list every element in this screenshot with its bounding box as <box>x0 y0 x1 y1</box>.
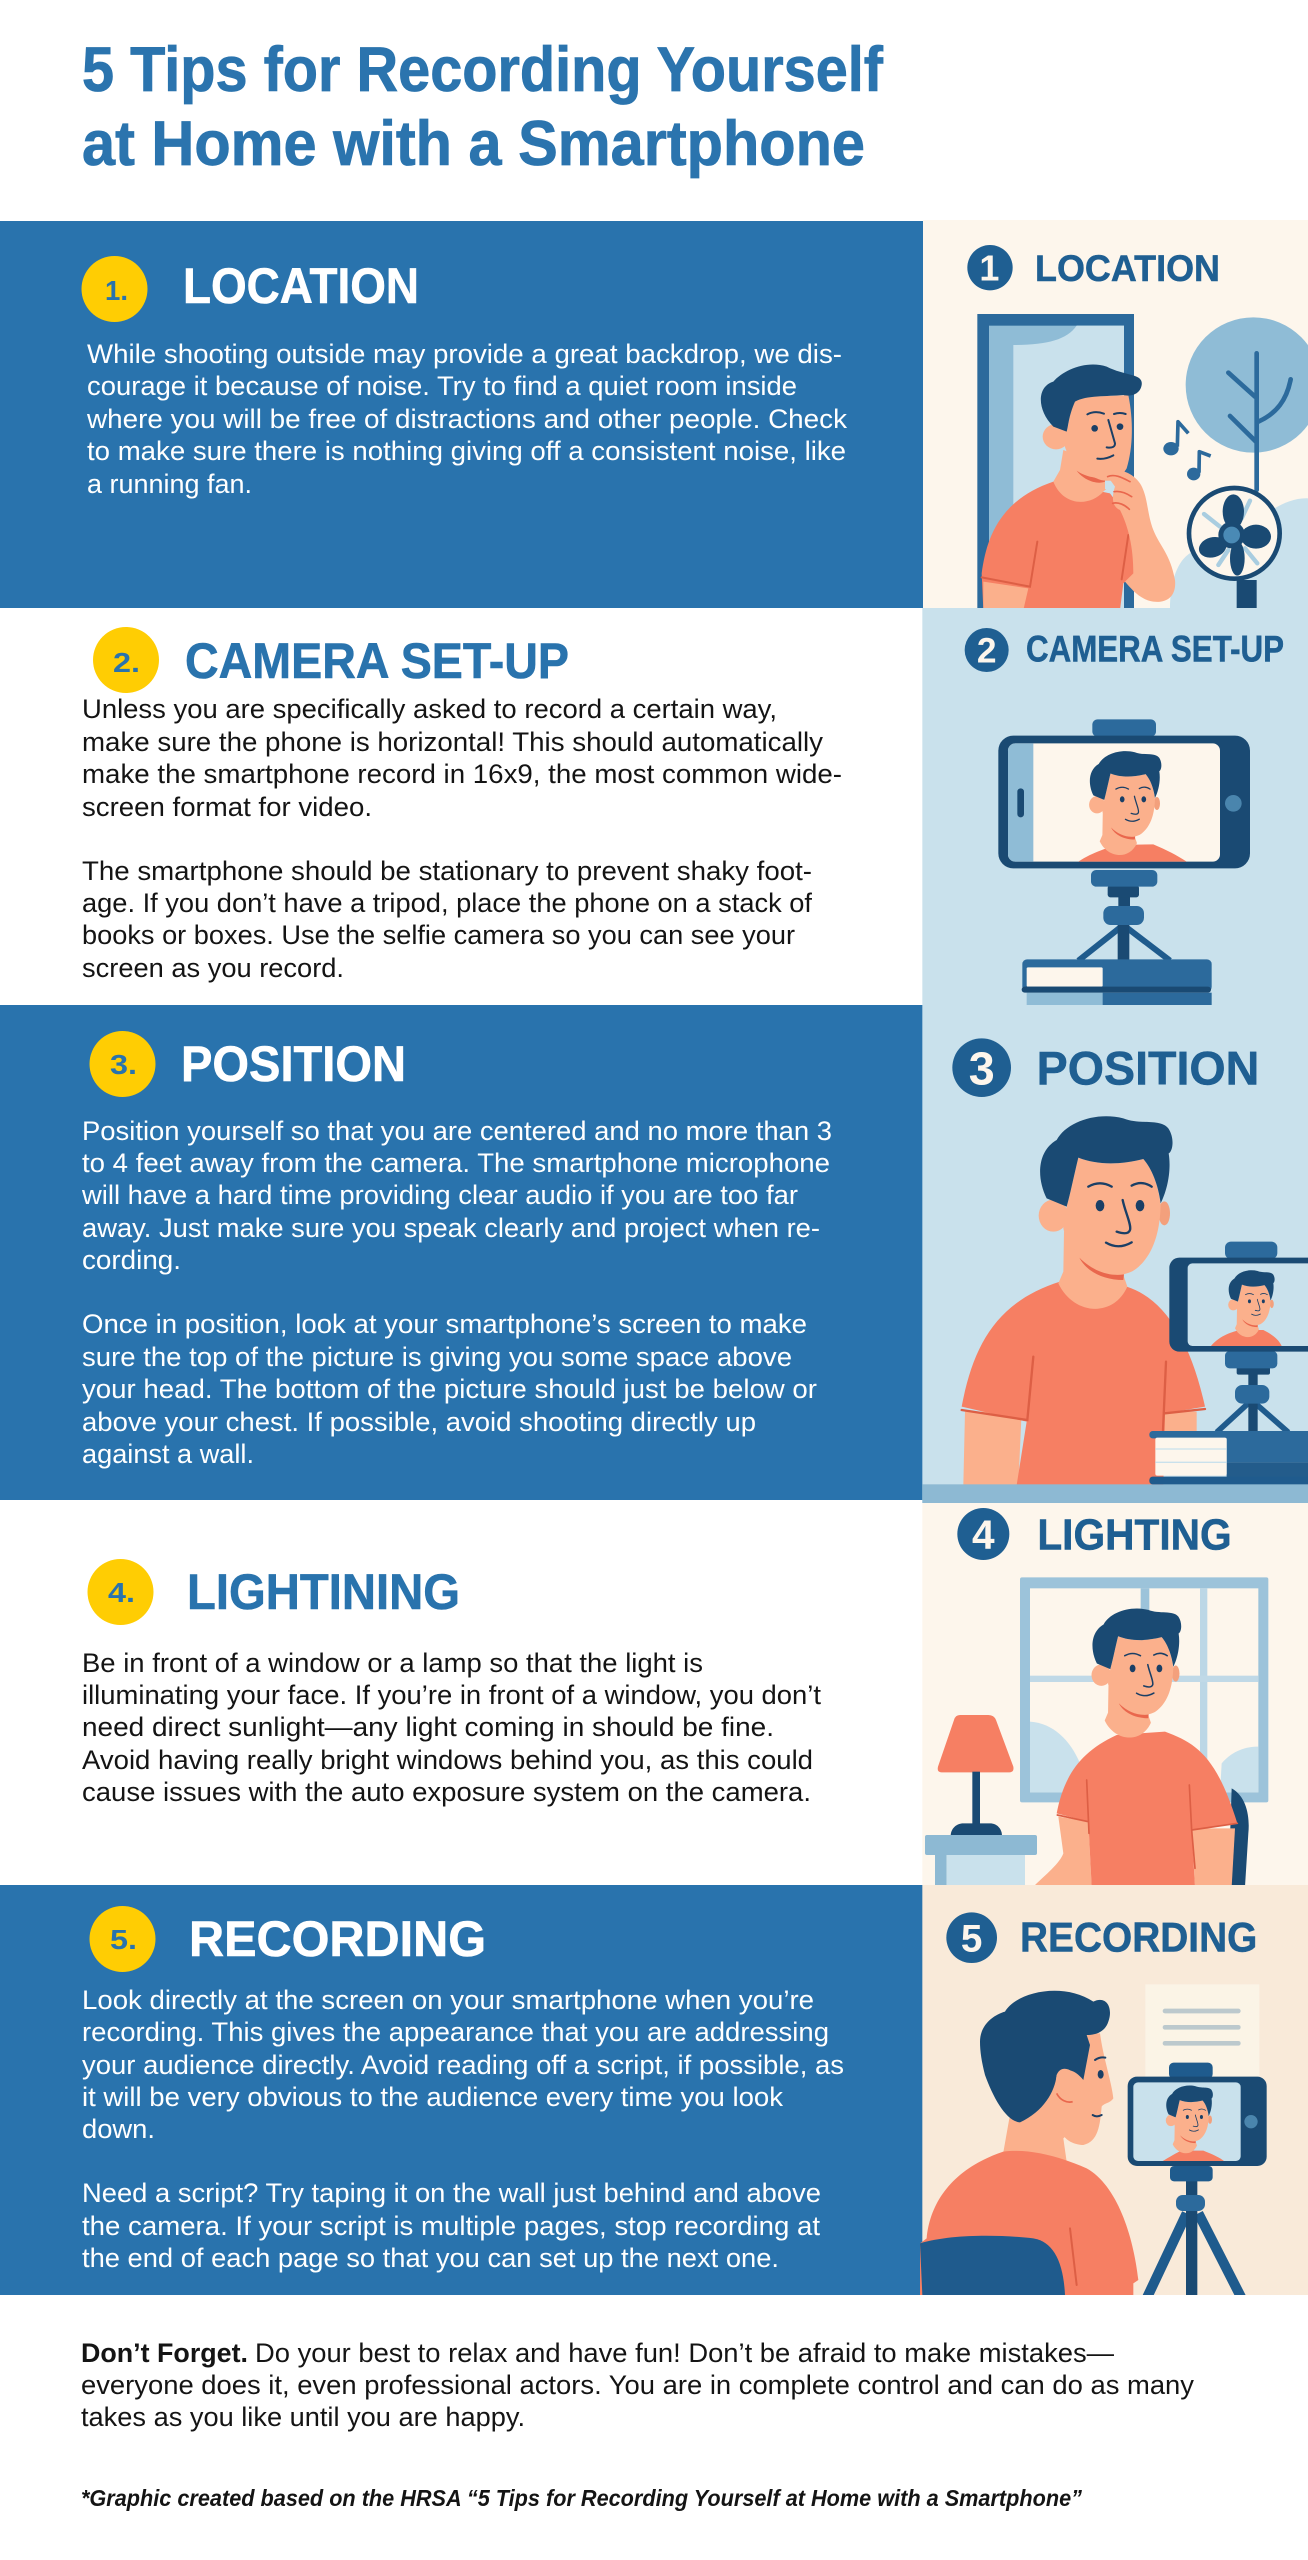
person from behind <box>920 1991 1138 2295</box>
step label 4: 4 <box>972 1512 995 1558</box>
step label 1: 1 <box>979 248 999 289</box>
script page <box>1145 1984 1259 2084</box>
title: at Home with a Smartphone <box>82 109 865 179</box>
body: recording: your audience directly. Avoid reading off a script, if possible, as <box>82 2050 844 2080</box>
body: recording: the end of each page so that you can set up the next one. <box>82 2243 779 2273</box>
tripod <box>1078 870 1170 961</box>
closing note: don't forget: takes as you like until you are happy. <box>81 2402 525 2432</box>
closing note: don't forget: Don’t Forget. <box>81 2338 248 2368</box>
body: lighting: Avoid having really bright windows behind you, as this could <box>82 1745 813 1775</box>
heading: lightining: LIGHTINING <box>187 1564 460 1620</box>
panel: camera set-up text <box>82 627 842 983</box>
body: position: to 4 feet away from the camera. The smartphone microphone <box>82 1148 830 1178</box>
tripod <box>1147 2166 1242 2298</box>
badge 1: 1. <box>105 275 128 306</box>
body: recording <box>82 1985 844 2273</box>
body: position: sure the top of the picture is giving you some space above <box>82 1342 792 1372</box>
window frame <box>977 314 1134 612</box>
badge 5: 5. <box>110 1924 137 1955</box>
body: camera set-up: Unless you are specifically asked to record a certain way, <box>82 694 777 724</box>
illustration: camera set-up <box>922 608 1308 1005</box>
body: camera set-up: age. If you don’t have a tripod, place the phone on a stack of <box>82 888 813 918</box>
body: lighting <box>82 1648 822 1807</box>
person facing camera <box>962 1116 1205 1485</box>
body: location <box>86 339 848 499</box>
body: location: courage it because of noise. Try to find a quiet room inside <box>87 371 797 401</box>
body: position <box>81 1116 832 1469</box>
body: location: to make sure there is nothing giving off a consistent noise, like <box>87 436 846 466</box>
phone on mount <box>998 719 1250 868</box>
panel: location text <box>0 221 923 608</box>
illustration: location <box>923 220 1308 608</box>
step label 3 <box>952 1038 1259 1097</box>
badge 2: 2. <box>113 647 140 678</box>
badge 3: 3. <box>110 1049 137 1080</box>
step label 5: 5 <box>961 1918 982 1961</box>
illustration: recording <box>920 1885 1308 2295</box>
badge 2 <box>93 627 159 693</box>
body: camera set-up: make the smartphone record in 16x9, the most common wide- <box>82 759 842 789</box>
body: position: above your chest. If possible, avoid shooting directly up <box>82 1407 756 1437</box>
badge 5 <box>90 1906 156 1972</box>
body: recording: recording. This gives the appearance that you are addressing <box>82 2017 829 2047</box>
tree <box>1170 317 1308 610</box>
body: camera set-up: The smartphone should be stationary to prevent shaky foot- <box>82 856 812 886</box>
body: position: Once in position, look at your smartphone’s screen to make <box>82 1309 807 1339</box>
title: 5 Tips for Recording Yourself <box>82 35 884 105</box>
badge 3 <box>90 1031 156 1097</box>
panel: lighting text <box>82 1559 822 1807</box>
badge 1 <box>82 256 148 322</box>
step label 3: 3 <box>969 1042 995 1094</box>
floor band <box>922 1484 1308 1503</box>
step label 4 <box>957 1508 1232 1560</box>
heading: location: LOCATION <box>183 258 419 314</box>
body: position: cording. <box>82 1245 181 1275</box>
window <box>1020 1577 1268 1802</box>
chair back <box>920 2236 1065 2295</box>
body: position: against a wall. <box>82 1439 254 1469</box>
panel: recording text <box>0 1885 923 2295</box>
icon: fan <box>1189 488 1280 610</box>
person in front of window <box>1033 1609 1237 1887</box>
body: lighting: illuminating your face. If you’re in front of a window, you don’t <box>82 1680 822 1710</box>
step label 3: POSITION <box>1037 1042 1259 1095</box>
body: position: away. Just make sure you speak clearly and project when re- <box>82 1213 820 1243</box>
closing note: don't forget <box>81 2338 1195 2432</box>
body: camera set-up: books or boxes. Use the selfie camera so you can see your <box>82 920 795 950</box>
step label 4: LIGHTING <box>1037 1511 1232 1559</box>
body: camera set-up: make sure the phone is horizontal! This should automatically <box>82 727 824 757</box>
step label 1 <box>967 245 1220 290</box>
chair <box>1228 1788 1249 1887</box>
lamp on table <box>925 1715 1037 1887</box>
body: recording: down. <box>82 2114 155 2144</box>
phone on tripod with small person <box>1169 1242 1308 1432</box>
body: position: will have a hard time providing clear audio if you are too far <box>81 1180 798 1210</box>
heading: recording: RECORDING <box>189 1911 486 1967</box>
step label 1: LOCATION <box>1035 247 1220 289</box>
closing note: don't forget: Do your best to relax and have fun! Don’t be afraid to make mistakes— <box>255 2338 1115 2368</box>
body: location: While shooting outside may provide a great backdrop, we dis- <box>87 339 842 369</box>
body: camera set-up: screen format for video. <box>82 792 372 822</box>
body: recording: Need a script? Try taping it on the wall just behind and above <box>82 2178 821 2208</box>
heading: position: POSITION <box>181 1036 406 1092</box>
body: recording: the camera. If your script is multiple pages, stop recording at <box>82 2211 821 2241</box>
title <box>82 35 884 179</box>
person thinking <box>982 365 1175 610</box>
body: location: where you will be free of distractions and other people. Check <box>86 404 848 434</box>
body: camera set-up: screen as you record. <box>82 953 344 983</box>
body: camera set-up <box>82 694 842 983</box>
badge 4 <box>88 1559 154 1625</box>
illustration: position <box>922 1005 1308 1503</box>
body: lighting: cause issues with the auto exposure system on the camera. <box>82 1777 811 1807</box>
illustration: lighting <box>922 1503 1308 1885</box>
body: lighting: Be in front of a window or a lamp so that the light is <box>82 1648 703 1678</box>
body: recording: it will be very obvious to the audience every time you look <box>82 2082 784 2112</box>
body: location: a running fan. <box>87 469 252 499</box>
panel: position text <box>0 1005 923 1500</box>
phone with small person <box>1128 2063 1267 2166</box>
body: recording: Look directly at the screen on your smartphone when you’re <box>82 1985 814 2015</box>
body: position: Position yourself so that you are centered and no more than 3 <box>82 1116 832 1146</box>
books <box>1149 1431 1308 1484</box>
books <box>1022 959 1212 1006</box>
body: position: your head. The bottom of the picture should just be below or <box>82 1374 817 1404</box>
body: lighting: need direct sunlight—any light coming in should be fine. <box>82 1712 774 1742</box>
step label 5 <box>946 1912 1257 1963</box>
heading: camera set-up: CAMERA SET-UP <box>185 633 569 689</box>
icon: music notes <box>1163 422 1211 480</box>
step label 5: RECORDING <box>1020 1914 1257 1961</box>
badge 4: 4. <box>108 1577 135 1608</box>
step label 2: 2 <box>977 632 996 671</box>
closing note: don't forget: everyone does it, even professional actors. You are in complete control and can do as many <box>81 2370 1195 2400</box>
footnote: *Graphic created based on the HRSA “5 Tips for Recording Yourself at Home with a Smartphone” <box>81 2485 1082 2511</box>
